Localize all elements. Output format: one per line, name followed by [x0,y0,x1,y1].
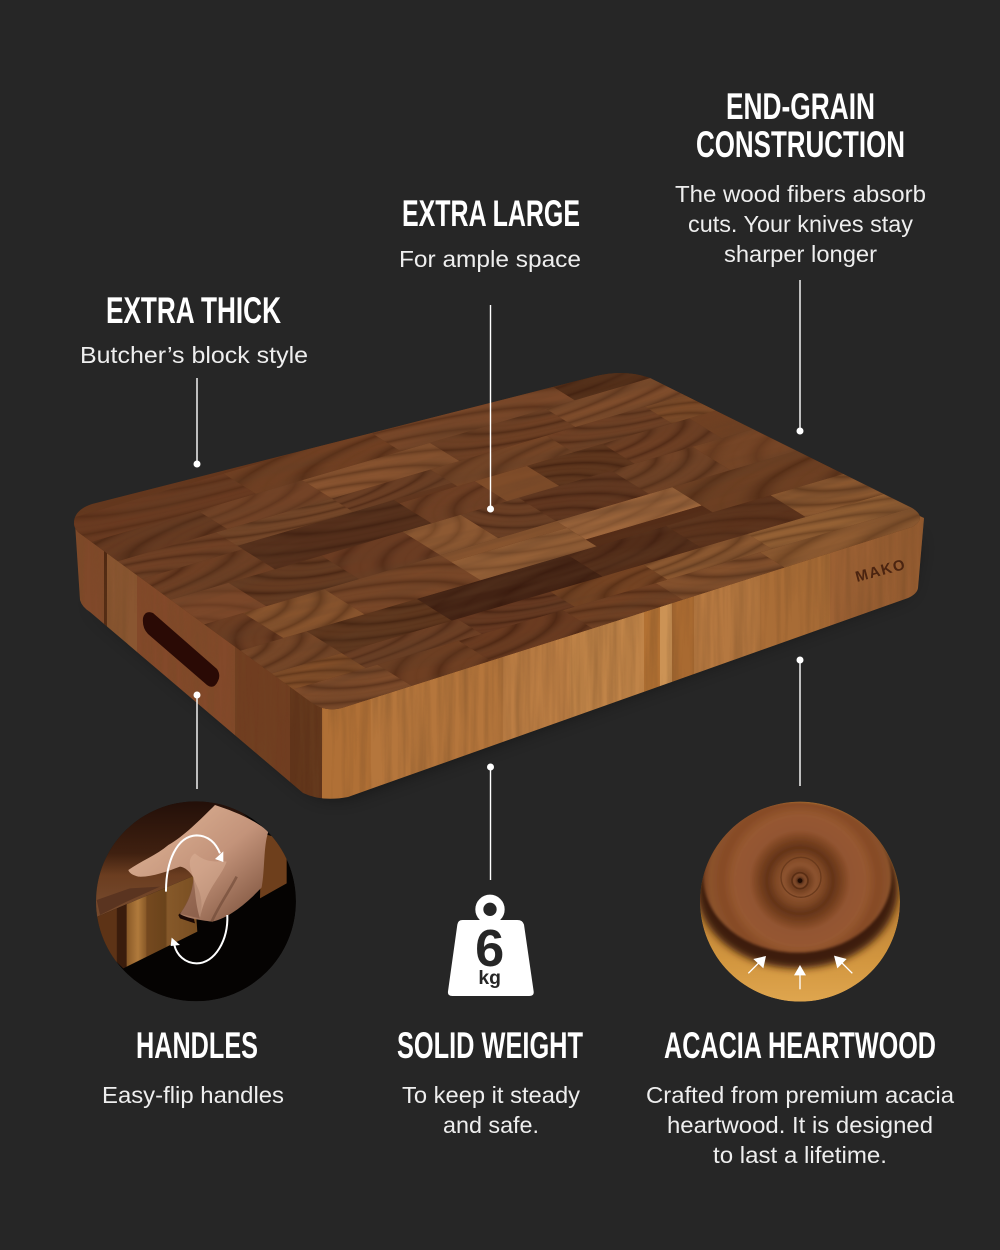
callout: handles: HANDLES [136,1025,258,1066]
callout: end-grain construction: The wood fibers absorb [675,181,926,207]
callout: end-grain construction [675,86,926,267]
photo: acacia heartwood cross-section [697,802,900,1002]
callout: extra large: For ample space [399,246,581,272]
callout: acacia heartwood: to last a lifetime. [713,1142,887,1168]
board shadow [90,540,915,794]
callout: solid weight: and safe. [443,1112,539,1138]
callout: solid weight: To keep it steady [402,1082,581,1108]
infographic canvas [74,93,954,1163]
callout: extra large [399,193,581,272]
leader: extra thick [194,378,200,468]
leader: end-grain construction [796,280,804,434]
callout: acacia heartwood: heartwood. It is designed [667,1112,933,1138]
callout: extra large: EXTRA LARGE [402,193,580,234]
callout: end-grain construction: cuts. Your knives stay [688,211,913,237]
end-grain top surface [74,373,920,710]
callout: acacia heartwood: Crafted from premium acacia [646,1082,954,1108]
icon: 6 kg weight: kg [478,968,501,989]
callout: solid weight: SOLID WEIGHT [397,1025,583,1066]
callout: handles [102,1025,284,1108]
photo: hand gripping board handle [93,797,296,1001]
callout: acacia heartwood [646,1025,954,1168]
callout: extra thick: EXTRA THICK [106,290,281,331]
icon: flip arrows [166,835,227,963]
icon: 6 kg weight [448,899,534,996]
callout: end-grain construction: END-GRAIN [726,86,875,127]
leader: solid weight [487,764,494,880]
leader: acacia heartwood [796,656,804,786]
callout: end-grain construction: sharper longer [724,241,877,267]
callout: end-grain construction: CONSTRUCTION [696,124,905,165]
leader: extra large [487,305,494,512]
board sides [75,516,924,799]
callout: extra thick [80,290,308,368]
icon: heartwood arrows [748,956,852,989]
icon: 6 kg weight: 6 [475,920,504,978]
callout: extra thick: Butcher’s block style [80,342,308,368]
handle slot [143,612,219,687]
callout: handles: Easy-flip handles [102,1082,284,1108]
callout: solid weight [397,1025,583,1138]
cutting board [74,373,924,799]
leader: handles [194,692,200,789]
brand mark: MAKO [854,556,908,586]
